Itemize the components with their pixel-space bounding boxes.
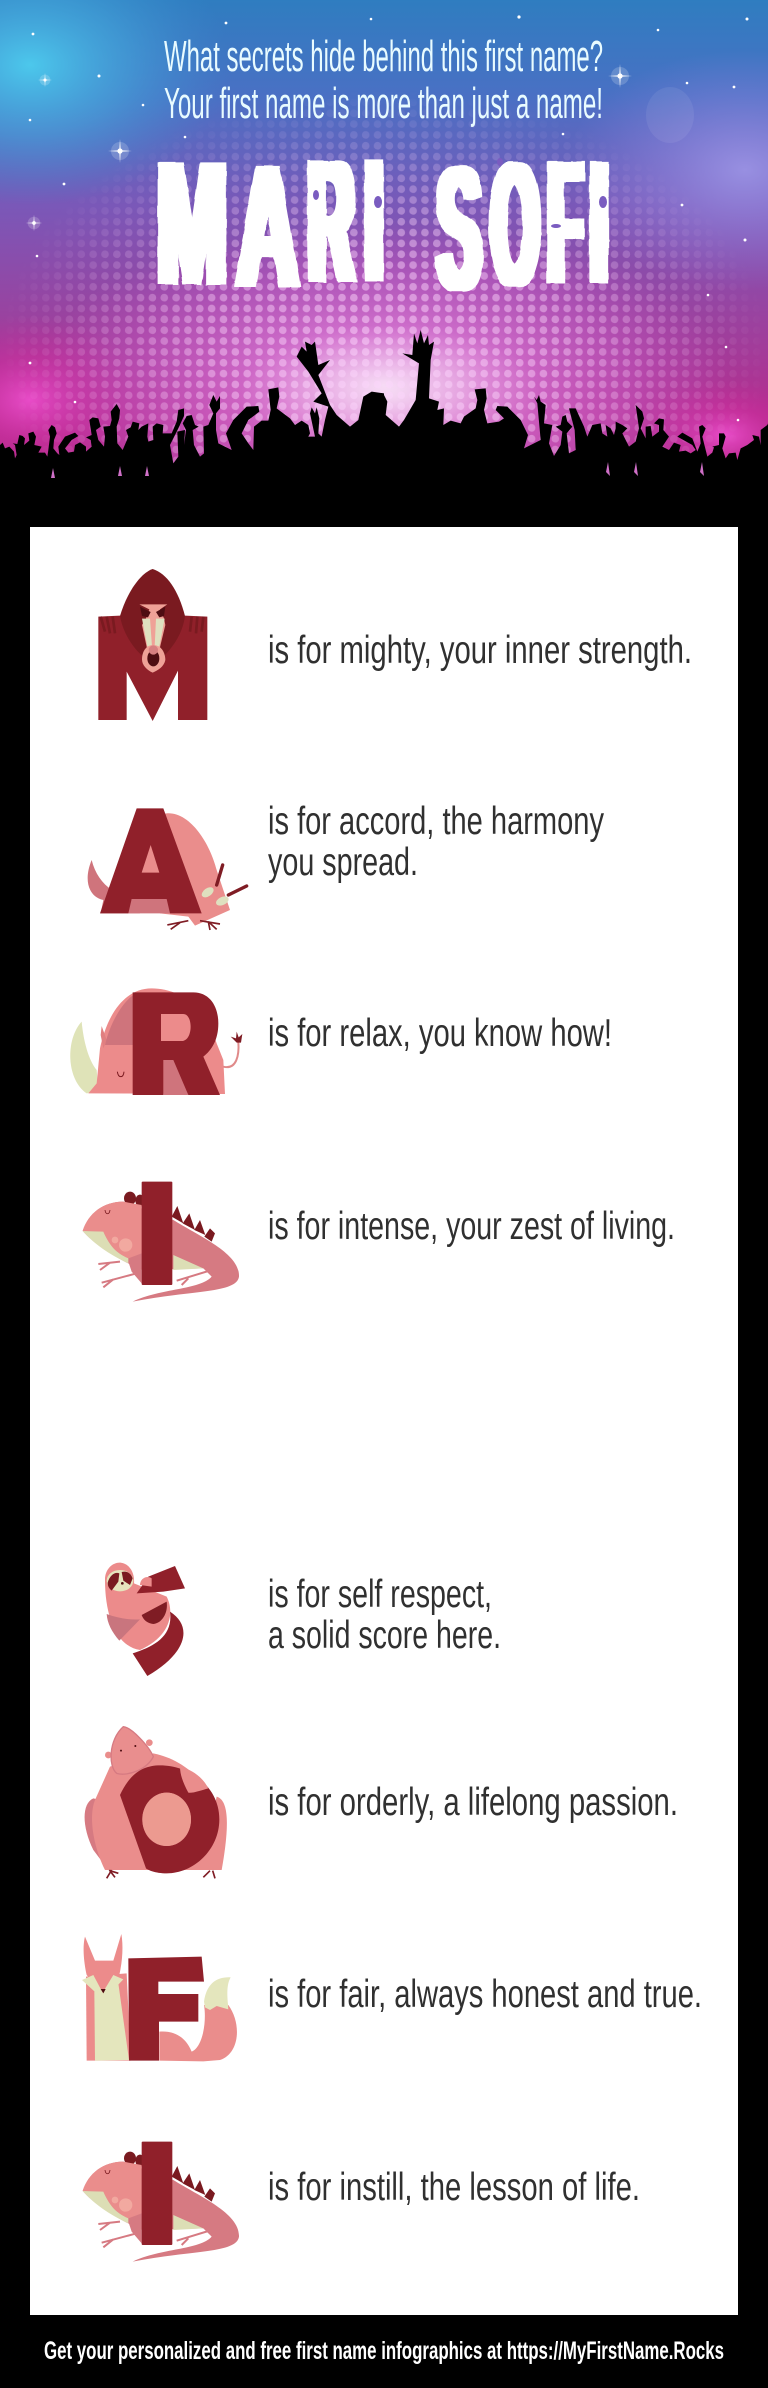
text: is for instill, the lesson of life.	[268, 2166, 640, 2209]
row M	[98, 569, 692, 721]
row R	[70, 988, 612, 1095]
title: name: A	[237, 129, 298, 325]
row S	[105, 1563, 501, 1676]
white content panel	[30, 527, 738, 2315]
header banner	[0, 0, 768, 478]
title: name: R	[308, 124, 354, 320]
tagline	[164, 32, 603, 128]
text: is for self respect,	[268, 1573, 492, 1616]
icon: O gorilla	[85, 1727, 227, 1878]
icon: S sloth	[105, 1563, 185, 1676]
row O	[85, 1727, 678, 1878]
sparkle stars	[26, 15, 749, 421]
title: name: O	[491, 127, 539, 323]
title: name: F	[548, 125, 582, 321]
title: name: I	[365, 123, 383, 319]
header banner: I	[590, 125, 608, 321]
row I	[83, 1182, 675, 1302]
title: name: M	[157, 126, 227, 322]
row A	[88, 800, 604, 930]
row I second	[83, 2142, 640, 2262]
title: name	[157, 123, 608, 327]
title: name: S	[437, 131, 481, 327]
row A: you spread.	[268, 841, 418, 884]
crowd silhouette	[0, 330, 768, 530]
text: is for relax, you know how!	[268, 1012, 612, 1055]
text: is for accord, the harmony	[268, 800, 604, 843]
stage background with lights	[0, 0, 768, 464]
icon: F fox	[82, 1934, 237, 2061]
icon: I iguana	[83, 2142, 239, 2262]
icon: R rhino	[70, 988, 242, 1095]
icon: I iguana	[83, 1182, 239, 1302]
row F	[82, 1934, 702, 2061]
icon: A armadillo	[88, 808, 247, 930]
row S: a solid score here.	[268, 1614, 501, 1657]
icon: M baboon	[98, 569, 207, 721]
